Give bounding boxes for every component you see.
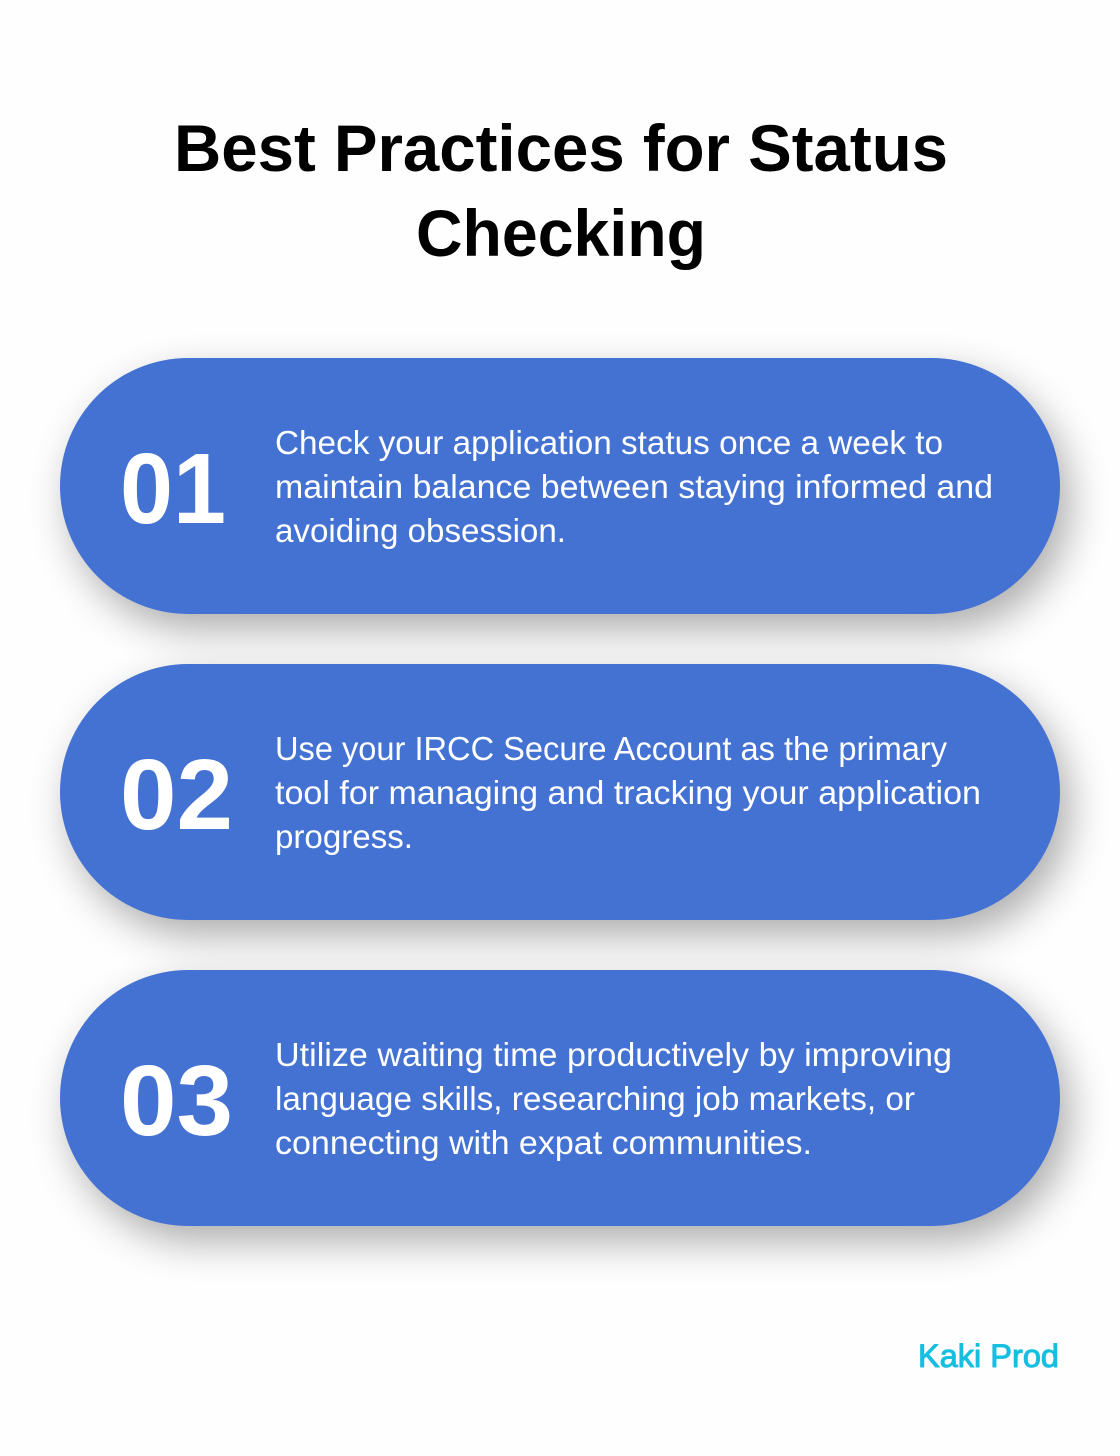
text block: step 01	[275, 424, 993, 549]
title	[174, 111, 948, 270]
logo: Kaki Prod: Kaki Prod	[918, 1338, 1059, 1374]
text block: step 02: progress.	[275, 818, 413, 855]
title: Checking	[416, 196, 706, 270]
text block: step 02: Use your IRCC Secure Account as the primary	[275, 730, 947, 767]
panel: step 02	[60, 664, 1060, 920]
text block: step 03	[275, 1036, 952, 1161]
number 03: 03	[120, 1045, 233, 1157]
text block: step 01: maintain balance between staying informed and	[275, 468, 993, 505]
text block: step 03: Utilize waiting time productively by improving	[275, 1036, 952, 1073]
text block: step 02	[275, 730, 981, 855]
number 01: 01	[120, 433, 226, 545]
panel: step 03	[60, 970, 1060, 1226]
text block: step 03: connecting with expat communities.	[275, 1124, 812, 1161]
text block: step 03: language skills, researching job markets, or	[275, 1080, 915, 1117]
text block: step 01: Check your application status once a week to	[275, 424, 943, 461]
text block: step 01: avoiding obsession.	[275, 512, 566, 549]
panel: step 01	[60, 358, 1060, 614]
text block: step 02: tool for managing and tracking your application	[275, 774, 981, 811]
number 02: 02	[120, 739, 233, 851]
title: Best Practices for Status	[174, 111, 948, 185]
